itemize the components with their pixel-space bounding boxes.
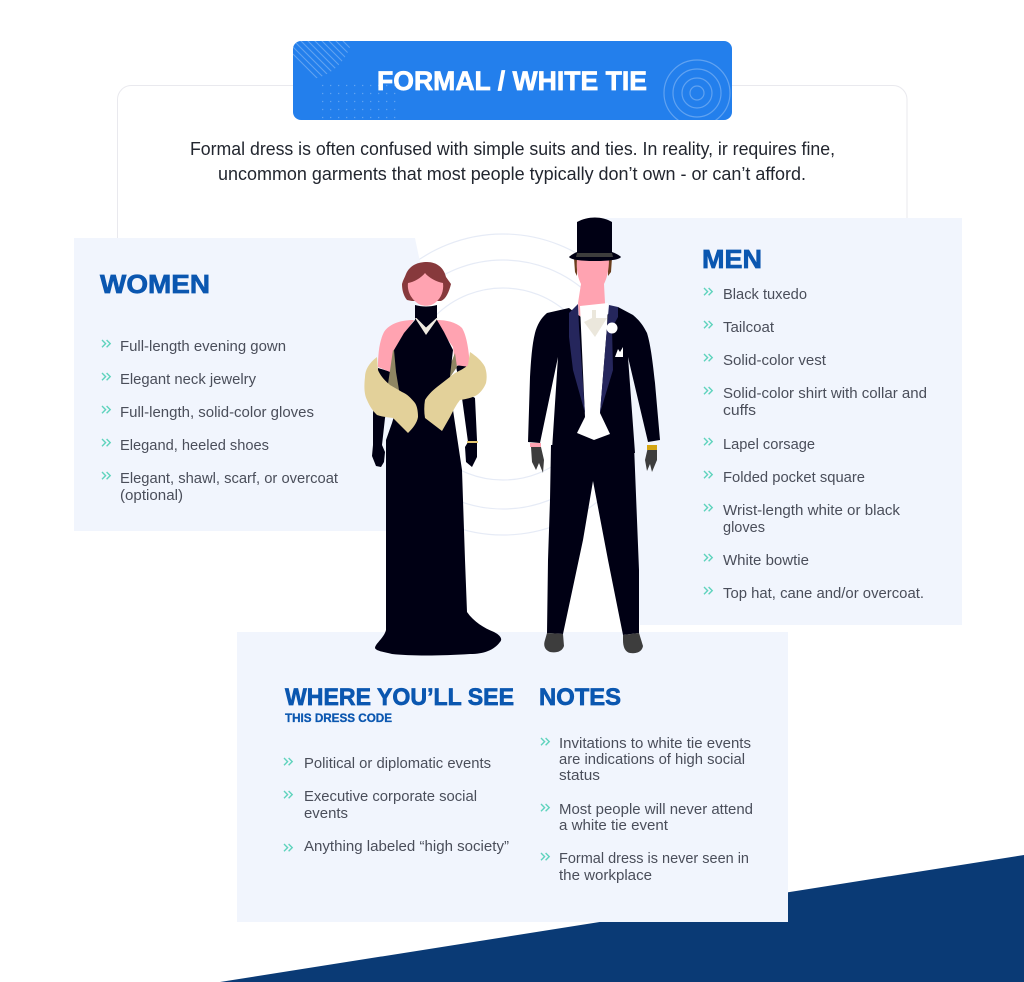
face and neck <box>577 259 609 316</box>
list: notes: Formal dress is never seen in <box>559 850 749 867</box>
lapel left <box>569 304 585 413</box>
gloves <box>531 447 544 473</box>
top hat <box>569 218 621 261</box>
list: where: Anything labeled “high society” <box>304 838 509 855</box>
concentric arcs <box>352 234 654 535</box>
list: women <box>102 338 339 504</box>
shawl right <box>424 352 487 431</box>
list: men: Tailcoat <box>723 319 775 336</box>
list: men: Black tuxedo <box>723 286 807 303</box>
list: men: cuffs <box>723 402 756 419</box>
title text: FORMAL / WHITE TIE <box>377 66 647 96</box>
list: notes: are indications of high social <box>559 751 745 768</box>
list: women: Elegand, heeled shoes <box>120 437 269 454</box>
figure: woman <box>364 262 501 656</box>
pocket square <box>615 347 623 357</box>
list: men: White bowtie <box>723 552 809 569</box>
list: women: Full-length, solid-color gloves <box>120 404 314 421</box>
panel: where and notes <box>237 632 788 922</box>
title banner <box>293 40 732 126</box>
heading: where you'll see: THIS DRESS CODE <box>285 711 392 725</box>
list: where: Executive corporate social <box>304 788 477 805</box>
list: women: Full-length evening gown <box>120 338 286 355</box>
heading: where you'll see: WHERE YOU’LL SEE <box>285 684 514 711</box>
intro text <box>190 139 835 184</box>
lower arms and gloves <box>372 364 477 467</box>
list: notes: Most people will never attend <box>559 801 753 818</box>
list: women: (optional) <box>120 487 183 504</box>
heading: men: MEN <box>702 244 762 274</box>
jacket <box>528 307 660 453</box>
list: men: Folded pocket square <box>723 469 865 486</box>
list: men: Solid-color vest <box>723 352 827 369</box>
shawl inner lining <box>388 350 457 394</box>
shawl left <box>364 357 418 433</box>
shoes <box>544 633 564 652</box>
navy corner background <box>220 855 1024 982</box>
list: notes <box>541 735 753 884</box>
cuffs and watch <box>530 443 657 450</box>
list: where: Political or diplomatic events <box>304 755 491 772</box>
intro card <box>118 86 907 240</box>
intro text: uncommon garments that most people typically don’t own - or can’t afford. <box>218 164 806 184</box>
shirt and waistcoat <box>577 303 610 440</box>
list: men <box>704 286 927 602</box>
list: notes: status <box>559 767 600 784</box>
list: men: gloves <box>723 519 765 536</box>
list: men: Solid-color shirt with collar and <box>723 385 927 402</box>
bare arms <box>378 320 470 372</box>
list: women: Elegant, shawl, scarf, or overcoat <box>120 470 339 487</box>
list: women: Elegant neck jewelry <box>120 371 256 388</box>
list: notes: a white tie event <box>559 817 669 834</box>
list: where <box>284 755 509 855</box>
list: where: events <box>304 805 348 822</box>
lapel right <box>600 305 618 413</box>
corsage <box>606 322 618 334</box>
intro text: Formal dress is often confused with simple suits and ties. In reality, ir requires fine, <box>190 139 835 159</box>
necklace <box>415 318 438 335</box>
list: men: Wrist-length white or black <box>723 502 900 519</box>
trousers <box>547 445 639 635</box>
hair sides <box>574 258 612 276</box>
list: notes: the workplace <box>559 867 652 884</box>
face <box>408 273 443 306</box>
figure: man <box>528 218 660 653</box>
panel: men <box>600 218 962 625</box>
hair <box>402 262 451 301</box>
list: notes: Invitations to white tie events <box>559 735 751 752</box>
bracelet <box>467 441 478 443</box>
heading: women: WOMEN <box>100 269 210 299</box>
heading: where you'll see <box>285 684 514 725</box>
panel: women <box>74 238 430 531</box>
bowtie <box>584 310 607 337</box>
list: men: Lapel corsage <box>723 436 815 453</box>
heading: notes: NOTES <box>539 684 621 711</box>
gown <box>375 305 501 656</box>
list: men: Top hat, cane and/or overcoat. <box>723 585 924 602</box>
